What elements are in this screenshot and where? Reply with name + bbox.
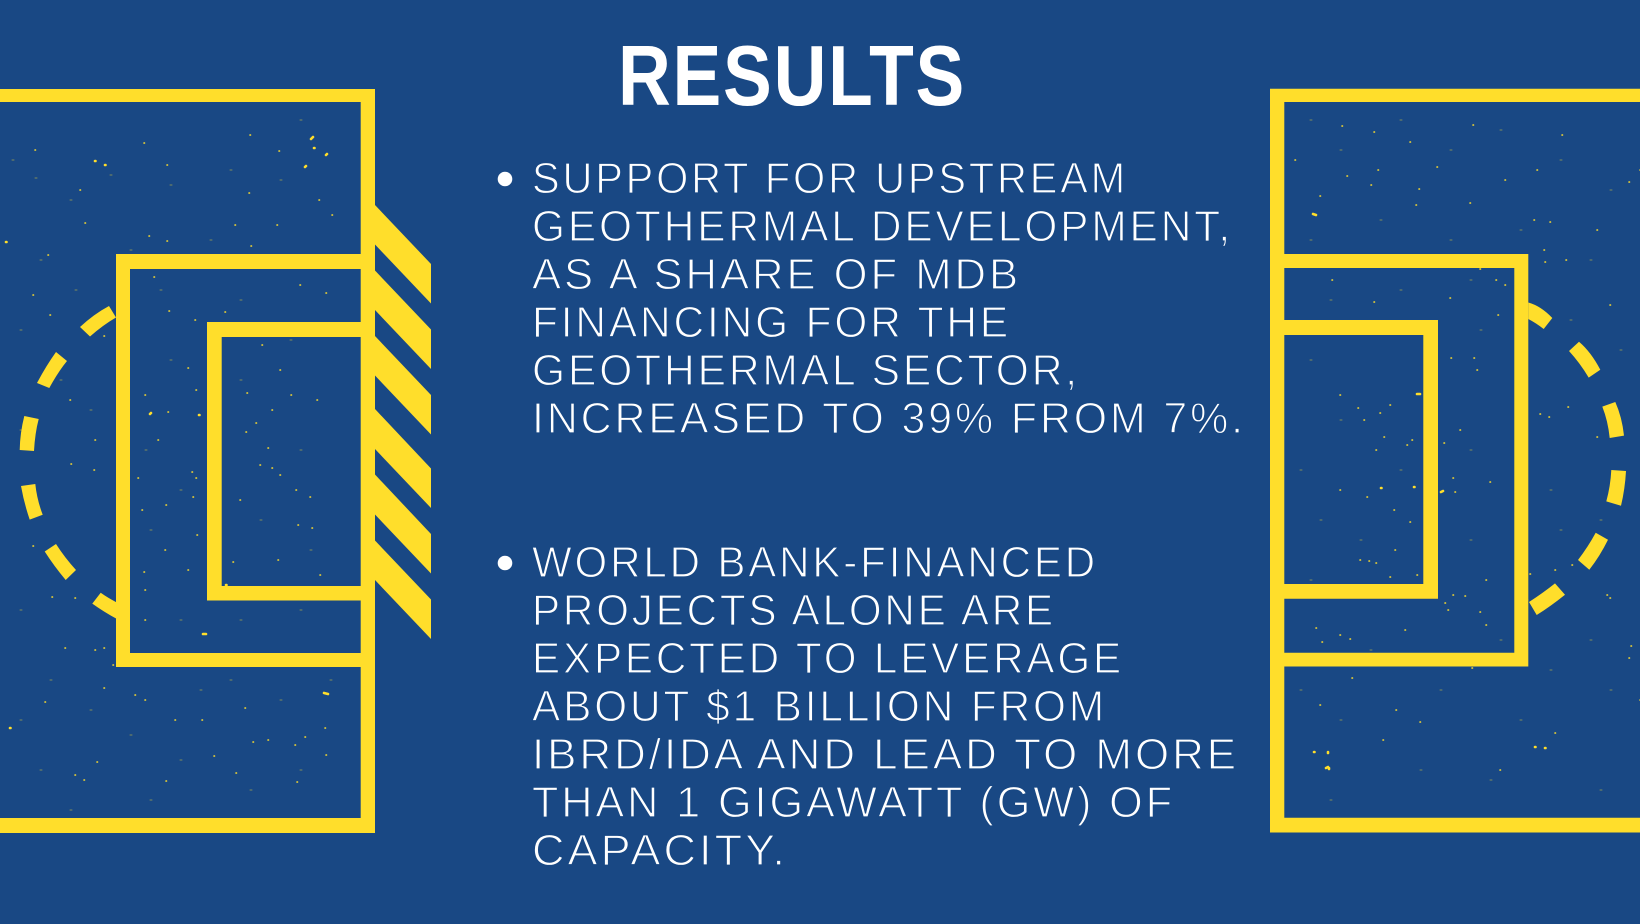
text lines 1: GEOTHERMAL SECTOR,: [532, 346, 1080, 395]
text lines 2: CAPACITY.: [532, 826, 788, 875]
text lines 2: WORLD BANK-FINANCED: [532, 538, 1098, 587]
text lines 1: FINANCING FOR THE: [532, 298, 1011, 347]
text lines 1: GEOTHERMAL DEVELOPMENT,: [532, 202, 1233, 251]
text lines 2: [532, 538, 1239, 875]
outer frame left: [0, 89, 375, 833]
inner frame right: [1284, 320, 1438, 599]
speckle texture right: [1295, 120, 1640, 800]
text lines 2: PROJECTS ALONE ARE: [532, 586, 1056, 635]
outer frame right: [1270, 89, 1640, 833]
text lines 2: ABOUT $1 BILLION FROM: [532, 682, 1107, 731]
bullet marker 2: [498, 556, 512, 570]
dashed arc right: [1528, 302, 1626, 615]
text lines 1: AS A SHARE OF MDB: [532, 250, 1021, 299]
text lines 2: IBRD/IDA AND LEAD TO MORE: [532, 730, 1239, 779]
bullet block: upstream geothermal support: [498, 154, 1246, 443]
text lines 2: EXPECTED TO LEVERAGE: [532, 634, 1124, 683]
bullet block: World Bank projects: [498, 538, 1239, 875]
text lines 2: THAN 1 GIGAWATT (GW) OF: [532, 778, 1175, 827]
text lines 1: SUPPORT FOR UPSTREAM: [532, 154, 1128, 203]
text lines 1: INCREASED TO 39% FROM 7%.: [532, 394, 1246, 443]
dashed arc left: [20, 306, 117, 619]
title: RESULTS: [618, 29, 966, 124]
hazard stripes: [375, 205, 431, 639]
bullet marker 1: [498, 172, 512, 186]
middle frame right: [1284, 254, 1528, 666]
text lines 1: [532, 154, 1246, 443]
inner frame left: [207, 322, 361, 600]
speckle texture left: [6, 120, 332, 810]
panel: left concentric frames graphic: [0, 89, 431, 833]
middle frame left: [116, 254, 361, 667]
panel: right concentric frames graphic: [1270, 89, 1640, 833]
